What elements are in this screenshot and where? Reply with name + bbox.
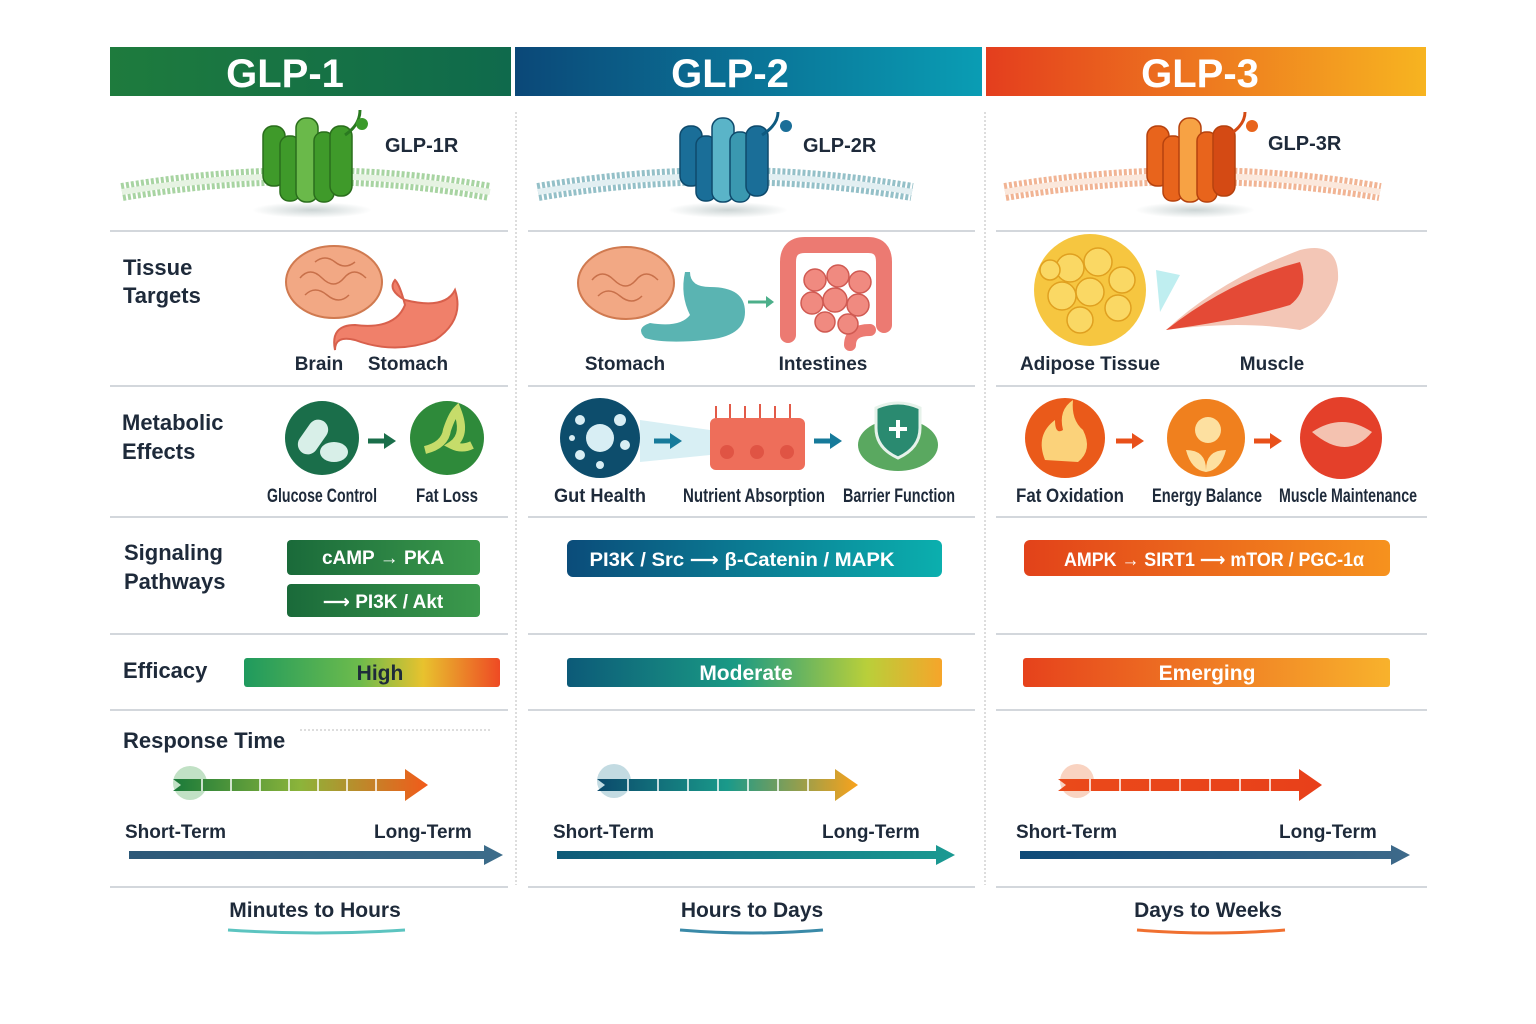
response time: GLP-2: Short-Term	[553, 822, 654, 843]
row label: Metabolic Effects: Metabolic	[122, 410, 223, 435]
tissue: brain + stomach (GLP-1): Brain	[295, 354, 343, 375]
effects: GLP-2	[554, 398, 955, 507]
effects: GLP-2: Barrier Function	[843, 486, 955, 507]
effects: GLP-1: Glucose Control	[267, 486, 377, 507]
effects: GLP-3: Muscle Maintenance	[1279, 486, 1417, 507]
response time: GLP-2	[553, 764, 955, 865]
duration: Hours to Days	[680, 899, 823, 933]
tissue: brain + stomach (GLP-1): Stomach	[368, 354, 448, 375]
efficacy: High: High	[357, 662, 403, 685]
response time: GLP-1	[125, 766, 503, 865]
effects: GLP-3	[1016, 397, 1417, 507]
pathway: GLP-3: AMPK → SIRT1 ⟶ mTOR / PGC-1α	[1064, 550, 1364, 571]
pathway: GLP-2: PI3K / Src ⟶ β-Catenin / MAPK	[590, 550, 895, 571]
efficacy: Moderate	[567, 658, 942, 687]
header: GLP-3	[986, 47, 1426, 96]
row label: Metabolic Effects: Effects	[122, 439, 195, 464]
effects: GLP-3: Fat Oxidation	[1016, 486, 1124, 507]
response time: GLP-3	[1016, 764, 1410, 865]
header: GLP-1: GLP-1	[226, 52, 344, 96]
receptor: GLP-2R: GLP-2R	[803, 135, 877, 157]
row label: Tissue Targets: Tissue	[123, 255, 192, 280]
response time: GLP-1: Long-Term	[374, 822, 472, 843]
duration: Hours to Days: Hours to Days	[681, 899, 823, 922]
row label: Efficacy: Efficacy	[123, 658, 208, 683]
header: GLP-3: GLP-3	[1141, 52, 1259, 96]
row label: Signaling Pathways: Signaling	[124, 540, 223, 565]
tissue: adipose + muscle (GLP-3): Adipose Tissue	[1020, 354, 1160, 375]
row label: Tissue Targets	[123, 255, 201, 308]
row label: Signaling Pathways	[124, 540, 226, 594]
pathway: GLP-1: cAMP → PKA	[322, 548, 444, 569]
tissue: adipose + muscle (GLP-3)	[1020, 234, 1338, 375]
header: GLP-1	[110, 47, 511, 96]
receptor: GLP-3R: GLP-3R	[1268, 133, 1342, 155]
efficacy: Emerging	[1023, 658, 1390, 687]
response time: GLP-3: Short-Term	[1016, 822, 1117, 843]
header: GLP-2	[515, 47, 982, 96]
duration: Days to Weeks: Days to Weeks	[1134, 899, 1282, 922]
response time: GLP-3: Long-Term	[1279, 822, 1377, 843]
duration: Minutes to Hours	[228, 899, 405, 933]
tissue: stomach + intestines (GLP-2)	[578, 245, 884, 375]
row label: Signaling Pathways: Pathways	[124, 569, 226, 594]
effects: GLP-3: Energy Balance	[1152, 486, 1262, 507]
response time: GLP-2: Long-Term	[822, 822, 920, 843]
row label: Tissue Targets: Targets	[123, 283, 201, 308]
efficacy: Moderate: Moderate	[699, 662, 793, 685]
receptor: GLP-1R	[122, 110, 490, 218]
pathway: GLP-2	[567, 540, 942, 577]
row label: Response Time: Response Time	[123, 728, 285, 753]
pathway: GLP-1: ⟶ PI3K / Akt	[323, 592, 444, 613]
duration: Days to Weeks	[1134, 899, 1285, 933]
tissue: adipose + muscle (GLP-3): Muscle	[1240, 354, 1304, 375]
efficacy: High	[244, 658, 500, 687]
pathway: GLP-3	[1024, 540, 1390, 576]
pathway: GLP-1	[287, 540, 480, 617]
row label: Metabolic Effects	[122, 410, 223, 464]
receptor: GLP-2R	[538, 112, 912, 218]
header: GLP-2: GLP-2	[671, 52, 789, 96]
receptor: GLP-1R: GLP-1R	[385, 135, 459, 157]
tissue: stomach + intestines (GLP-2): Intestines	[779, 354, 867, 375]
duration: Minutes to Hours: Minutes to Hours	[229, 899, 401, 922]
receptor: GLP-3R	[1005, 112, 1380, 218]
effects: GLP-2: Nutrient Absorption	[683, 486, 825, 507]
effects: GLP-1: Fat Loss	[416, 486, 478, 507]
efficacy: Emerging: Emerging	[1159, 662, 1255, 685]
effects: GLP-1	[267, 401, 484, 507]
effects: GLP-2: Gut Health	[554, 486, 646, 507]
response time: GLP-1: Short-Term	[125, 822, 226, 843]
tissue: stomach + intestines (GLP-2): Stomach	[585, 354, 665, 375]
tissue: brain + stomach (GLP-1)	[286, 246, 458, 375]
